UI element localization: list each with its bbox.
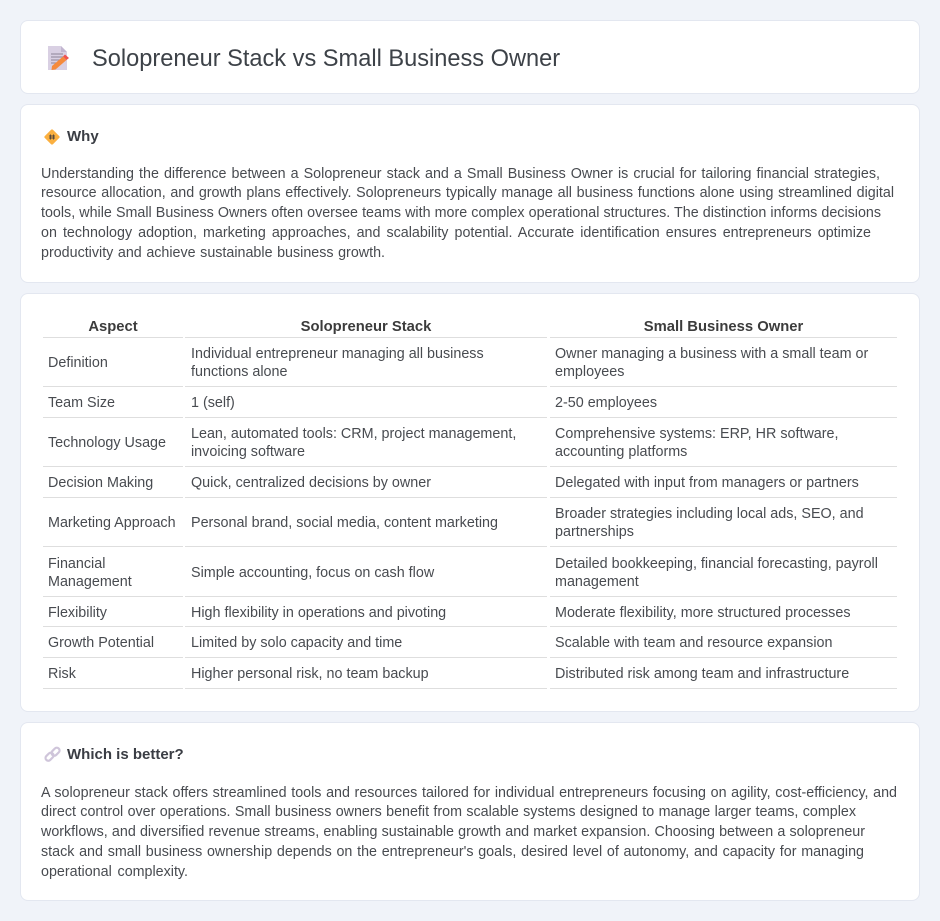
table row: flexibility: [43, 604, 897, 627]
table row: marketing approach: partnerships: [555, 524, 634, 540]
table row: growth potential: Growth Potential: [48, 635, 154, 651]
text block: which is better paragraph: stack and small business ownership depends on the entrepreneur's goals, desired level of autonomy, and capacity for managing: [41, 844, 864, 860]
text block: which is better paragraph: direct control over operations. Small business owners benefit from scalable systems designed to manage larger teams, complex: [41, 804, 856, 820]
table row: definition: Individual entrepreneur managing all business: [191, 346, 484, 362]
table row: financial management: Detailed bookkeeping, financial forecasting, payroll: [555, 556, 878, 572]
table row: financial management: management: [555, 574, 639, 590]
table row: financial management: Simple accounting, focus on cash flow: [191, 564, 434, 580]
table header row: [43, 319, 897, 338]
table row: marketing approach: Personal brand, social media, content marketing: [191, 515, 498, 531]
table row: financial management: [43, 556, 897, 597]
table header row: Aspect: [88, 319, 138, 335]
table row: marketing approach: [43, 506, 897, 547]
text block: which is better paragraph: workflows, and diversified revenue streams, enabling sustainable growth and market expansion. Choosing between a solopreneur: [41, 824, 865, 840]
icon: memo with pencil: [48, 46, 69, 70]
text block: why paragraph: resource allocation, and growth plans effectively. Solopreneurs typically manage all business functions alone using streamlined digital: [41, 185, 894, 201]
icon: diamond sign: [44, 129, 60, 145]
table row: growth potential: Scalable with team and resource expansion: [555, 635, 832, 651]
title: Solopreneur Stack vs Small Business Owner: [92, 46, 560, 72]
table row: technology usage: invoicing software: [191, 444, 305, 460]
text block: which is better paragraph: operational complexity.: [41, 864, 188, 880]
table row: technology usage: [43, 426, 897, 467]
table row: team size: Team Size: [48, 395, 115, 411]
panel: why: [20, 104, 920, 283]
table row: team size: [43, 395, 897, 418]
table row: definition: functions alone: [191, 364, 288, 380]
table row: definition: employees: [555, 364, 624, 380]
table row: financial management: Financial: [48, 556, 105, 572]
table row: definition: Definition: [48, 355, 108, 371]
table row: flexibility: Flexibility: [48, 604, 107, 620]
table row: marketing approach: Marketing Approach: [48, 515, 176, 531]
table row: risk: Risk: [48, 666, 76, 682]
table row: risk: Distributed risk among team and infrastructure: [555, 666, 849, 682]
table row: risk: Higher personal risk, no team backup: [191, 666, 429, 682]
text block: why paragraph: [41, 166, 894, 261]
table row: decision making: [43, 475, 897, 498]
heading: which is better: Which is better?: [67, 746, 184, 763]
table row: definition: [43, 346, 897, 387]
table row: technology usage: Lean, automated tools: CRM, project management,: [191, 426, 516, 442]
table row: definition: Owner managing a business with a small team or: [555, 346, 868, 362]
text block: why paragraph: Understanding the difference between a Solopreneur stack and a Small Business Owner is crucial for tailoring financial strategies,: [41, 166, 880, 182]
table row: team size: 2-50 employees: [555, 395, 657, 411]
table row: financial management: Management: [48, 574, 132, 590]
table row: growth potential: Limited by solo capacity and time: [191, 635, 402, 651]
table row: flexibility: Moderate flexibility, more structured processes: [555, 604, 850, 620]
text block: which is better paragraph: [41, 784, 897, 880]
text block: why paragraph: tools, while Small Business Owners often oversee teams with more complex operational structures. The distinction informs decisions: [41, 205, 881, 221]
table row: growth potential: [43, 635, 897, 658]
text block: why paragraph: on technology adoption, marketing approaches, and scalability potential. Accurate identification ensures entrepreneurs optimize: [41, 225, 871, 241]
table row: decision making: Decision Making: [48, 475, 153, 491]
panel: which is better: [20, 722, 920, 901]
table row: team size: 1 (self): [191, 395, 235, 411]
table row: marketing approach: Broader strategies including local ads, SEO, and: [555, 506, 864, 522]
panel: page header: [20, 20, 920, 94]
icon: link: [44, 746, 61, 762]
table row: risk: [43, 666, 897, 689]
table row: technology usage: Comprehensive systems: ERP, HR software,: [555, 426, 839, 442]
text block: which is better paragraph: A solopreneur stack offers streamlined tools and resources tailored for individual entrepreneurs focusing on agility, cost-efficiency, and: [41, 784, 897, 800]
table row: technology usage: accounting platforms: [555, 444, 687, 460]
text block: why paragraph: productivity and achieve sustainable business growth.: [41, 245, 385, 261]
table header row: Small Business Owner: [644, 319, 803, 335]
heading: why: Why: [67, 128, 99, 145]
table header row: Solopreneur Stack: [301, 319, 431, 335]
table row: technology usage: Technology Usage: [48, 435, 166, 451]
table row: decision making: Delegated with input from managers or partners: [555, 475, 859, 491]
table row: flexibility: High flexibility in operations and pivoting: [191, 604, 446, 620]
panel: comparison table: [20, 293, 920, 712]
table row: decision making: Quick, centralized decisions by owner: [191, 475, 431, 491]
